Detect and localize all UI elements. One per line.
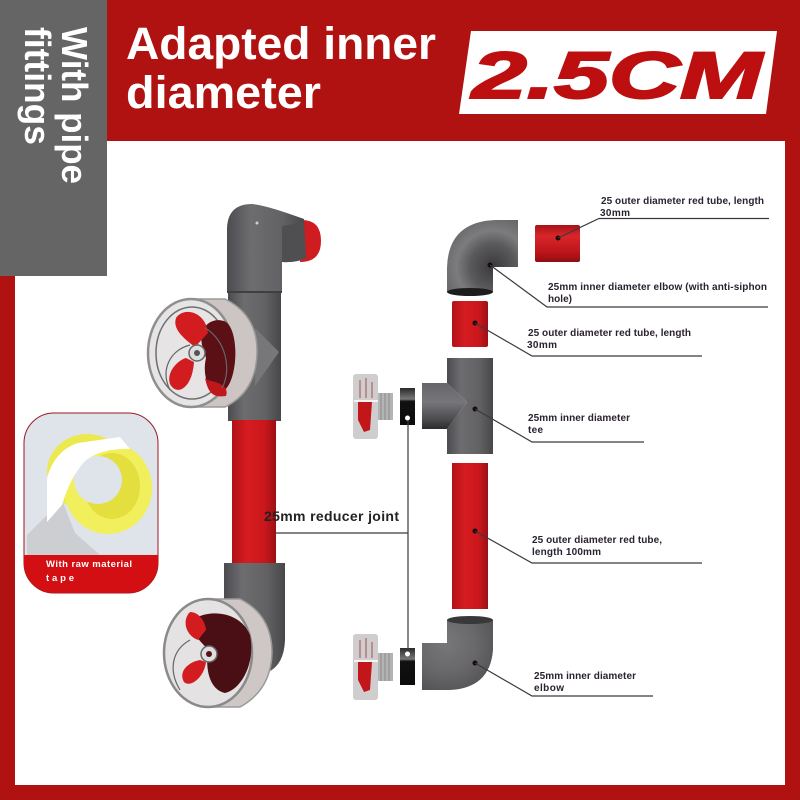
callout: elbow: 25mm inner diameter elbow (with anti-siphon — [548, 282, 767, 293]
small fan lower — [353, 634, 393, 700]
short red tube top — [535, 225, 580, 262]
size badge: 2.5CM — [469, 38, 765, 112]
elbow with anti-siphon hole — [447, 220, 518, 296]
white content panel — [15, 141, 785, 785]
callout: tee: 25mm inner diameter — [528, 413, 630, 424]
raw material tape card: With raw material — [46, 559, 132, 570]
callout: lower elbow — [472, 660, 653, 696]
lower fan — [164, 599, 272, 707]
red end cap — [300, 220, 321, 262]
callout: long red tube — [472, 528, 702, 563]
tape caption — [24, 555, 158, 593]
reducer ring lower — [400, 648, 415, 685]
callout: tee — [472, 406, 644, 442]
tape roll icon — [27, 434, 152, 555]
callout: top red tube: 25 outer diameter red tube, length — [601, 196, 764, 207]
red middle tube — [232, 420, 276, 566]
small fan upper — [353, 374, 393, 439]
title: Adapted inner — [126, 18, 436, 69]
upper gray pipe with tee — [228, 293, 281, 421]
title: diameter — [126, 67, 321, 118]
size badge — [459, 31, 777, 114]
callout: lower elbow: elbow — [534, 683, 564, 694]
reducer joint callout: 25mm reducer joint — [264, 508, 399, 524]
side tab text: fittings — [17, 27, 58, 145]
side tab text — [17, 27, 95, 184]
assembled pipe — [148, 204, 321, 707]
short red tube middle — [452, 301, 488, 347]
raw material tape card — [24, 413, 158, 593]
upper fan — [148, 299, 257, 407]
lower gray elbow — [224, 563, 285, 672]
reducer ring upper — [400, 388, 415, 425]
callout: long red tube: length 100mm — [532, 547, 601, 558]
callout: elbow — [488, 262, 768, 307]
top elbow — [227, 204, 306, 293]
callout: long red tube: 25 outer diameter red tube, — [532, 535, 662, 546]
callout: middle red tube — [472, 320, 702, 356]
callout: middle red tube: 25 outer diameter red tube, length — [528, 328, 691, 339]
lower elbow — [422, 616, 493, 690]
callout: elbow: hole) — [548, 294, 572, 305]
long red tube — [452, 463, 488, 609]
callout: top red tube — [556, 196, 769, 240]
callout: lower elbow: 25mm inner diameter — [534, 671, 636, 682]
gray side tab — [0, 0, 107, 276]
raw material tape card: tape — [46, 573, 74, 584]
callout: tee: tee — [528, 425, 543, 436]
side tab text: With pipe — [54, 27, 95, 184]
callout: top red tube: 30mm — [600, 208, 630, 219]
title — [126, 18, 436, 118]
callout: middle red tube: 30mm — [527, 340, 557, 351]
reducer joint callout — [264, 416, 410, 656]
tee — [422, 358, 493, 454]
exploded parts — [353, 220, 580, 700]
